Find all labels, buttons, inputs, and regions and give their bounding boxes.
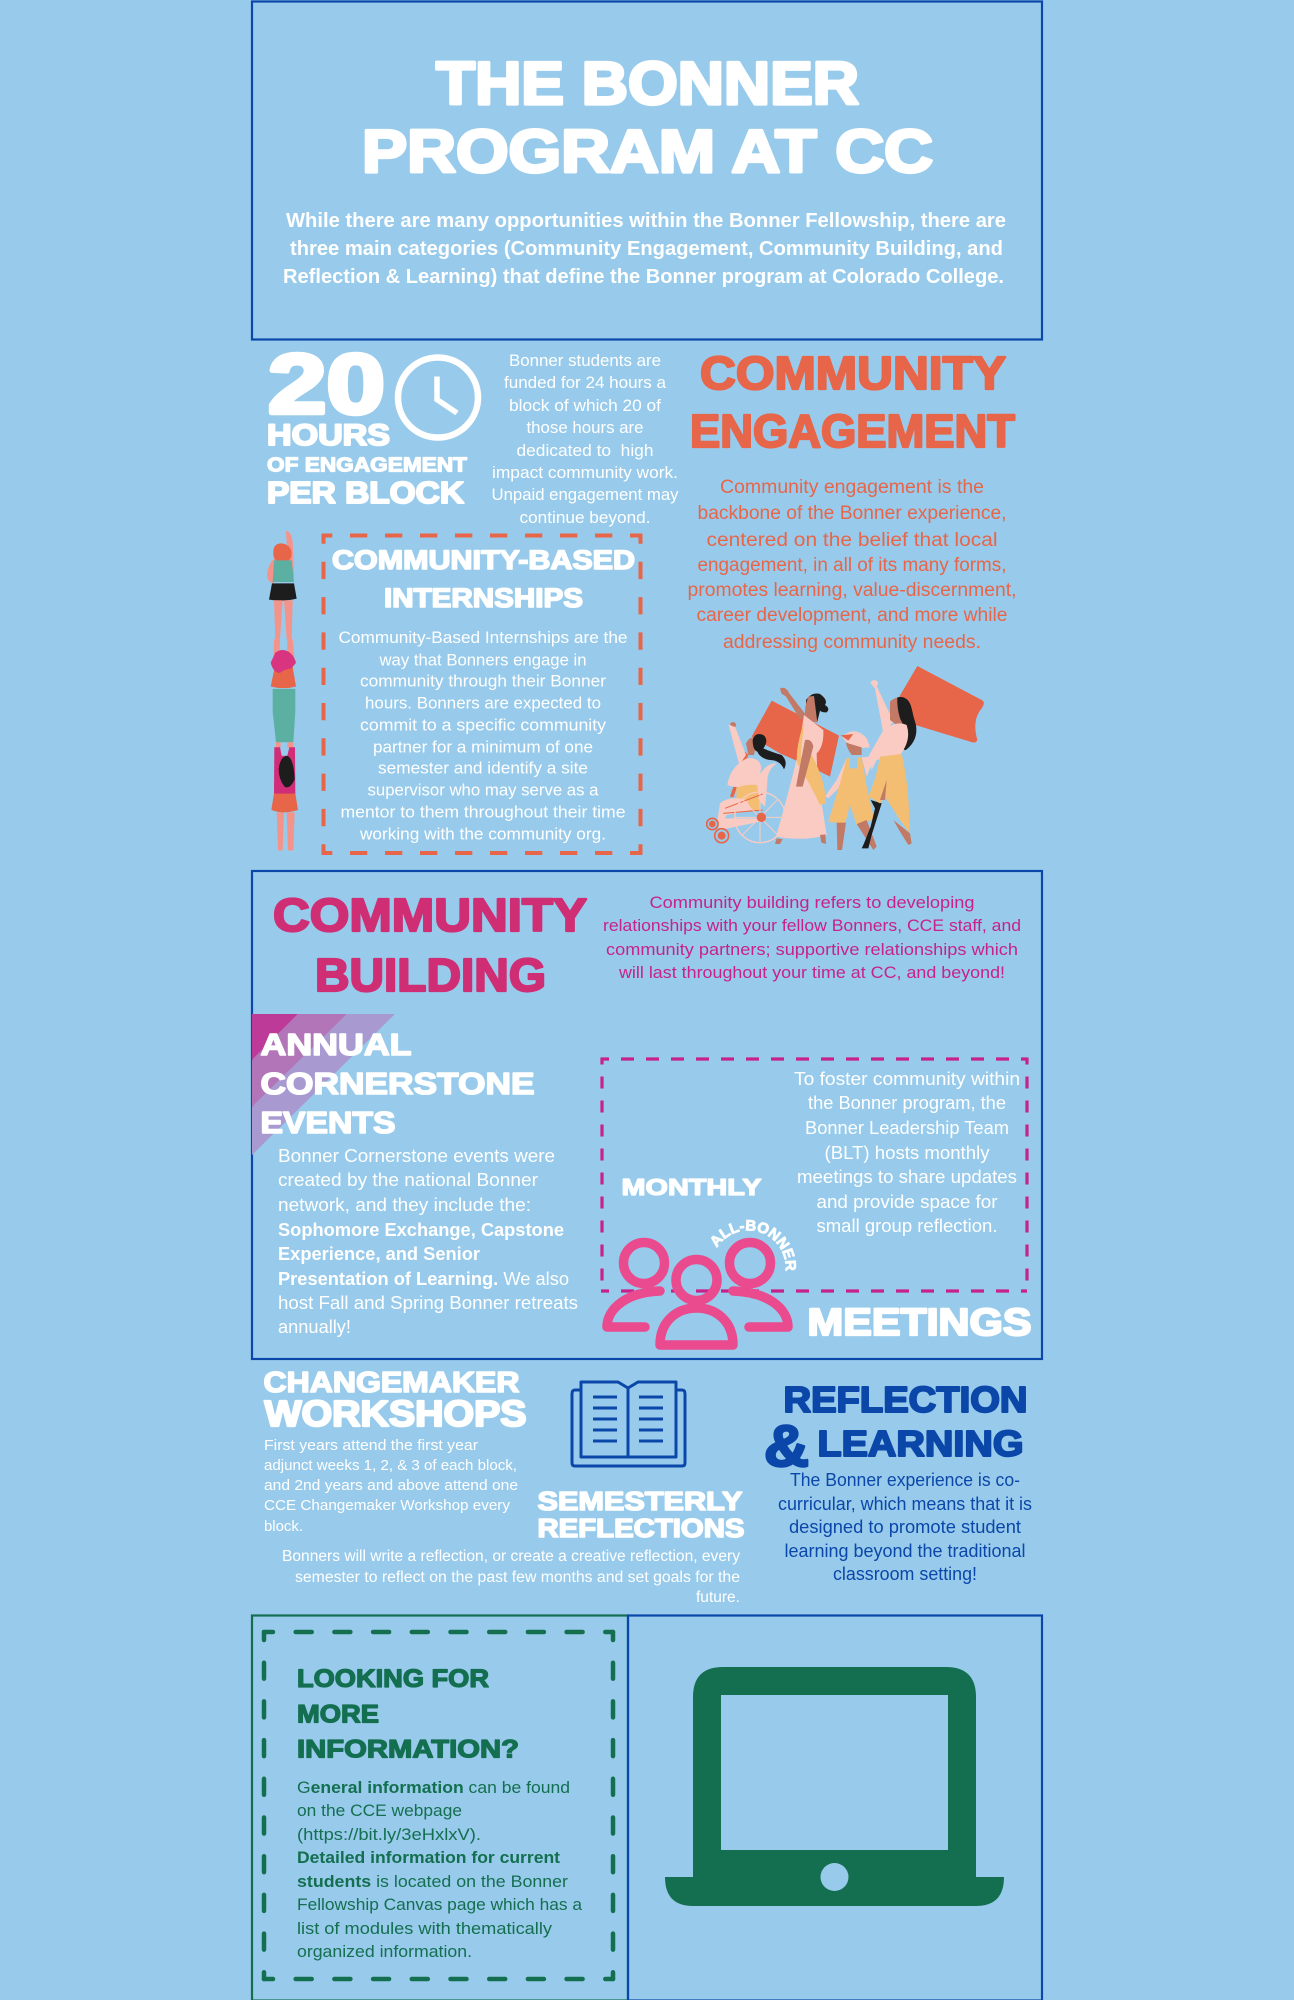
title: PROGRAM AT CC xyxy=(362,118,933,185)
text: funded hours: Unpaid engagement may xyxy=(492,486,679,504)
text: funded hours: block of which 20 of xyxy=(509,397,661,415)
body text: on the CCE webpage xyxy=(297,1801,462,1820)
text: funded hours xyxy=(492,352,679,527)
text: reflection description: designed to promote student xyxy=(789,1517,1021,1537)
text: community engagement description: Community engagement is the xyxy=(720,477,984,498)
dashed border xyxy=(601,1058,1027,1292)
panel: title header xyxy=(252,2,1042,340)
text: cornerstone events description: Bonner Cornerstone events were xyxy=(278,1146,555,1166)
text: reflection description: classroom setting! xyxy=(833,1564,977,1584)
heading: reflection and learning: REFLECTION xyxy=(784,1379,1028,1420)
intro text: Reflection & Learning) that define the Bonner program at Colorado College. xyxy=(283,266,1004,288)
stat: 20 hours of engagement per block: OF ENGAGEMENT xyxy=(267,454,467,476)
body text: working with the community org. xyxy=(359,826,606,844)
text: changemaker description: and 2nd years and above attend one xyxy=(264,1477,518,1494)
heading: annual cornerstone events: EVENTS xyxy=(260,1105,396,1140)
illustration: stacked climbing figures xyxy=(267,531,298,850)
text: changemaker description xyxy=(264,1437,518,1535)
dashed border xyxy=(264,1632,613,1979)
heading: COMMUNITY-BASED xyxy=(332,545,635,575)
text: funded hours: dedicated to high xyxy=(516,442,654,460)
heading: reflection and learning: & xyxy=(764,1414,809,1479)
body text: way that Bonners engage in xyxy=(378,652,586,670)
text: community engagement description: promotes learning, value-discernment, xyxy=(688,580,1016,601)
intro text: three main categories (Community Engagement, Community Building, and xyxy=(290,238,1003,260)
title xyxy=(362,50,933,185)
text: funded hours: continue beyond. xyxy=(520,509,650,527)
text: community engagement description: backbone of the Bonner experience, xyxy=(698,503,1006,524)
text: community engagement description: career development, and more while xyxy=(696,605,1008,626)
text: reflections description: semester to reflect on the past few months and set goals for the xyxy=(295,1569,740,1586)
heading: LOOKING FOR xyxy=(297,1665,489,1693)
panel: community-based internships xyxy=(323,534,641,855)
panel: laptop xyxy=(628,1616,1042,2000)
label: monthly: MONTHLY xyxy=(622,1174,762,1200)
illustration: people marching with flags xyxy=(707,666,984,850)
heading: community building xyxy=(273,889,587,1001)
stat: 20 hours of engagement per block xyxy=(267,337,467,510)
diagonal stripes decoration xyxy=(252,1014,395,1155)
text: reflections description xyxy=(282,1548,740,1606)
heading: semesterly reflections xyxy=(538,1488,744,1543)
heading: community engagement: COMMUNITY xyxy=(700,347,1006,399)
text: reflections description: future. xyxy=(696,1589,740,1606)
text: funded hours: funded for 24 hours a xyxy=(504,374,667,392)
heading: semesterly reflections: REFLECTIONS xyxy=(538,1515,744,1543)
text: changemaker description: CCE Changemaker Workshop every xyxy=(264,1497,511,1514)
text: community engagement description xyxy=(688,477,1016,653)
text: community building description: Community building refers to developing xyxy=(650,893,974,912)
body text: list of modules with thematically xyxy=(297,1919,553,1938)
stat: 20 hours of engagement per block: PER BLOCK xyxy=(267,475,465,510)
heading: reflection and learning xyxy=(764,1379,1028,1479)
heading xyxy=(332,545,635,613)
icon: laptop xyxy=(665,1667,1004,1906)
body text: commit to a specific community xyxy=(360,716,607,734)
text: meetings description: meetings to share updates xyxy=(797,1167,1017,1187)
text: funded hours: impact community work. xyxy=(492,464,678,482)
text: cornerstone events description: Sophomore Exchange, Capstone xyxy=(278,1220,564,1240)
text: cornerstone events description xyxy=(278,1146,578,1337)
text: meetings description: (BLT) hosts monthly xyxy=(824,1143,990,1163)
body text: organized information. xyxy=(297,1942,472,1961)
text: reflections description: Bonners will write a reflection, or create a creative reflection, every xyxy=(282,1548,740,1565)
text: cornerstone events description: network, and they include the: xyxy=(278,1195,531,1215)
body text: supervisor who may serve as a xyxy=(368,782,599,800)
text: meetings description: Bonner Leadership Team xyxy=(805,1118,1009,1138)
heading: changemaker workshops: WORKSHOPS xyxy=(264,1393,526,1434)
text: meetings description: the Bonner program, the xyxy=(808,1093,1006,1113)
text: meetings description: small group reflection. xyxy=(816,1216,998,1236)
heading: reflection and learning: LEARNING xyxy=(818,1423,1024,1464)
text: funded hours: those hours are xyxy=(526,419,644,437)
heading: MORE xyxy=(297,1700,379,1728)
text: meetings description: To foster community within xyxy=(794,1069,1020,1089)
body text xyxy=(297,1778,583,1961)
text: reflection description: curricular, which means that it is xyxy=(778,1494,1032,1514)
body text: (https://bit.ly/3eHxlxV). xyxy=(297,1825,481,1844)
icon: clock xyxy=(398,358,478,438)
body text: students is located on the Bonner xyxy=(297,1872,568,1891)
intro text xyxy=(283,210,1006,288)
text: community engagement description: addressing community needs. xyxy=(723,632,981,653)
heading: annual cornerstone events: ANNUAL xyxy=(260,1027,412,1062)
text: community building description: community partners; supportive relationships which xyxy=(606,940,1018,959)
text: cornerstone events description: Presentation of Learning. We also xyxy=(278,1269,569,1289)
heading: annual cornerstone events xyxy=(260,1027,534,1140)
heading: community building: BUILDING xyxy=(315,949,546,1001)
text: meetings description xyxy=(794,1069,1020,1236)
text: meetings description: and provide space for xyxy=(816,1192,998,1212)
heading: changemaker workshops: CHANGEMAKER xyxy=(264,1367,520,1399)
label: all-bonner arc text: ALL-BONNER xyxy=(711,1220,796,1272)
body text: hours. Bonners are expected to xyxy=(365,694,601,712)
body text xyxy=(338,629,628,844)
heading: community engagement: ENGAGEMENT xyxy=(690,405,1015,457)
heading: INTERNSHIPS xyxy=(384,583,583,613)
panel: community building xyxy=(250,870,1044,1360)
icon: group of people xyxy=(607,1242,788,1345)
text: cornerstone events description: created by the national Bonner xyxy=(278,1170,538,1190)
heading: changemaker workshops xyxy=(264,1367,526,1434)
dashed border xyxy=(323,534,641,855)
stat: 20 hours of engagement per block: HOURS xyxy=(267,419,390,452)
heading: community building: COMMUNITY xyxy=(273,889,587,941)
heading: semesterly reflections: SEMESTERLY xyxy=(538,1488,742,1516)
heading xyxy=(297,1665,519,1764)
text: community engagement description: centered on the belief that local xyxy=(706,530,998,551)
body text: mentor to them throughout their time xyxy=(340,804,626,822)
text: reflection description: The Bonner experience is co- xyxy=(790,1470,1020,1490)
body text: partner for a minimum of one xyxy=(373,738,593,756)
body text: General information can be found xyxy=(297,1778,570,1797)
text: reflection description: learning beyond the traditional xyxy=(784,1541,1026,1561)
panel: monthly all-bonner meetings xyxy=(600,1057,1032,1350)
title: THE BONNER xyxy=(436,50,859,117)
text: cornerstone events description: Experience, and Senior xyxy=(278,1244,480,1264)
text: reflection description xyxy=(778,1470,1032,1584)
body text: semester and identify a site xyxy=(378,760,588,778)
text: community building description: will last throughout your time at CC, and beyond! xyxy=(618,963,1005,982)
body text: Community-Based Internships are the xyxy=(338,629,628,647)
heading: annual cornerstone events: CORNERSTONE xyxy=(260,1066,534,1101)
stat: 20 hours of engagement per block: 20 xyxy=(268,337,385,431)
text: funded hours: Bonner students are xyxy=(509,352,661,370)
heading: INFORMATION? xyxy=(297,1736,519,1764)
text: changemaker description: block. xyxy=(264,1518,303,1535)
text: changemaker description: First years attend the first year xyxy=(264,1437,478,1454)
body text: Fellowship Canvas page which has a xyxy=(297,1895,583,1914)
body text: community through their Bonner xyxy=(360,672,607,690)
text: cornerstone events description: annually! xyxy=(278,1317,351,1337)
icon: open book xyxy=(572,1382,685,1466)
body text: Detailed information for current xyxy=(297,1848,560,1867)
text: community building description: relationships with your fellow Bonners, CCE staff, and xyxy=(603,916,1021,935)
text: community building description xyxy=(603,893,1021,982)
text: community engagement description: engagement, in all of its many forms, xyxy=(698,555,1006,576)
panel: looking for more information xyxy=(252,1616,628,2000)
text: changemaker description: adjunct weeks 1, 2, & 3 of each block, xyxy=(264,1457,517,1474)
text: cornerstone events description: host Fall and Spring Bonner retreats xyxy=(278,1293,578,1313)
intro text: While there are many opportunities within the Bonner Fellowship, there are xyxy=(286,210,1006,232)
label: meetings: MEETINGS xyxy=(808,1302,1032,1344)
heading: community engagement xyxy=(690,347,1015,457)
